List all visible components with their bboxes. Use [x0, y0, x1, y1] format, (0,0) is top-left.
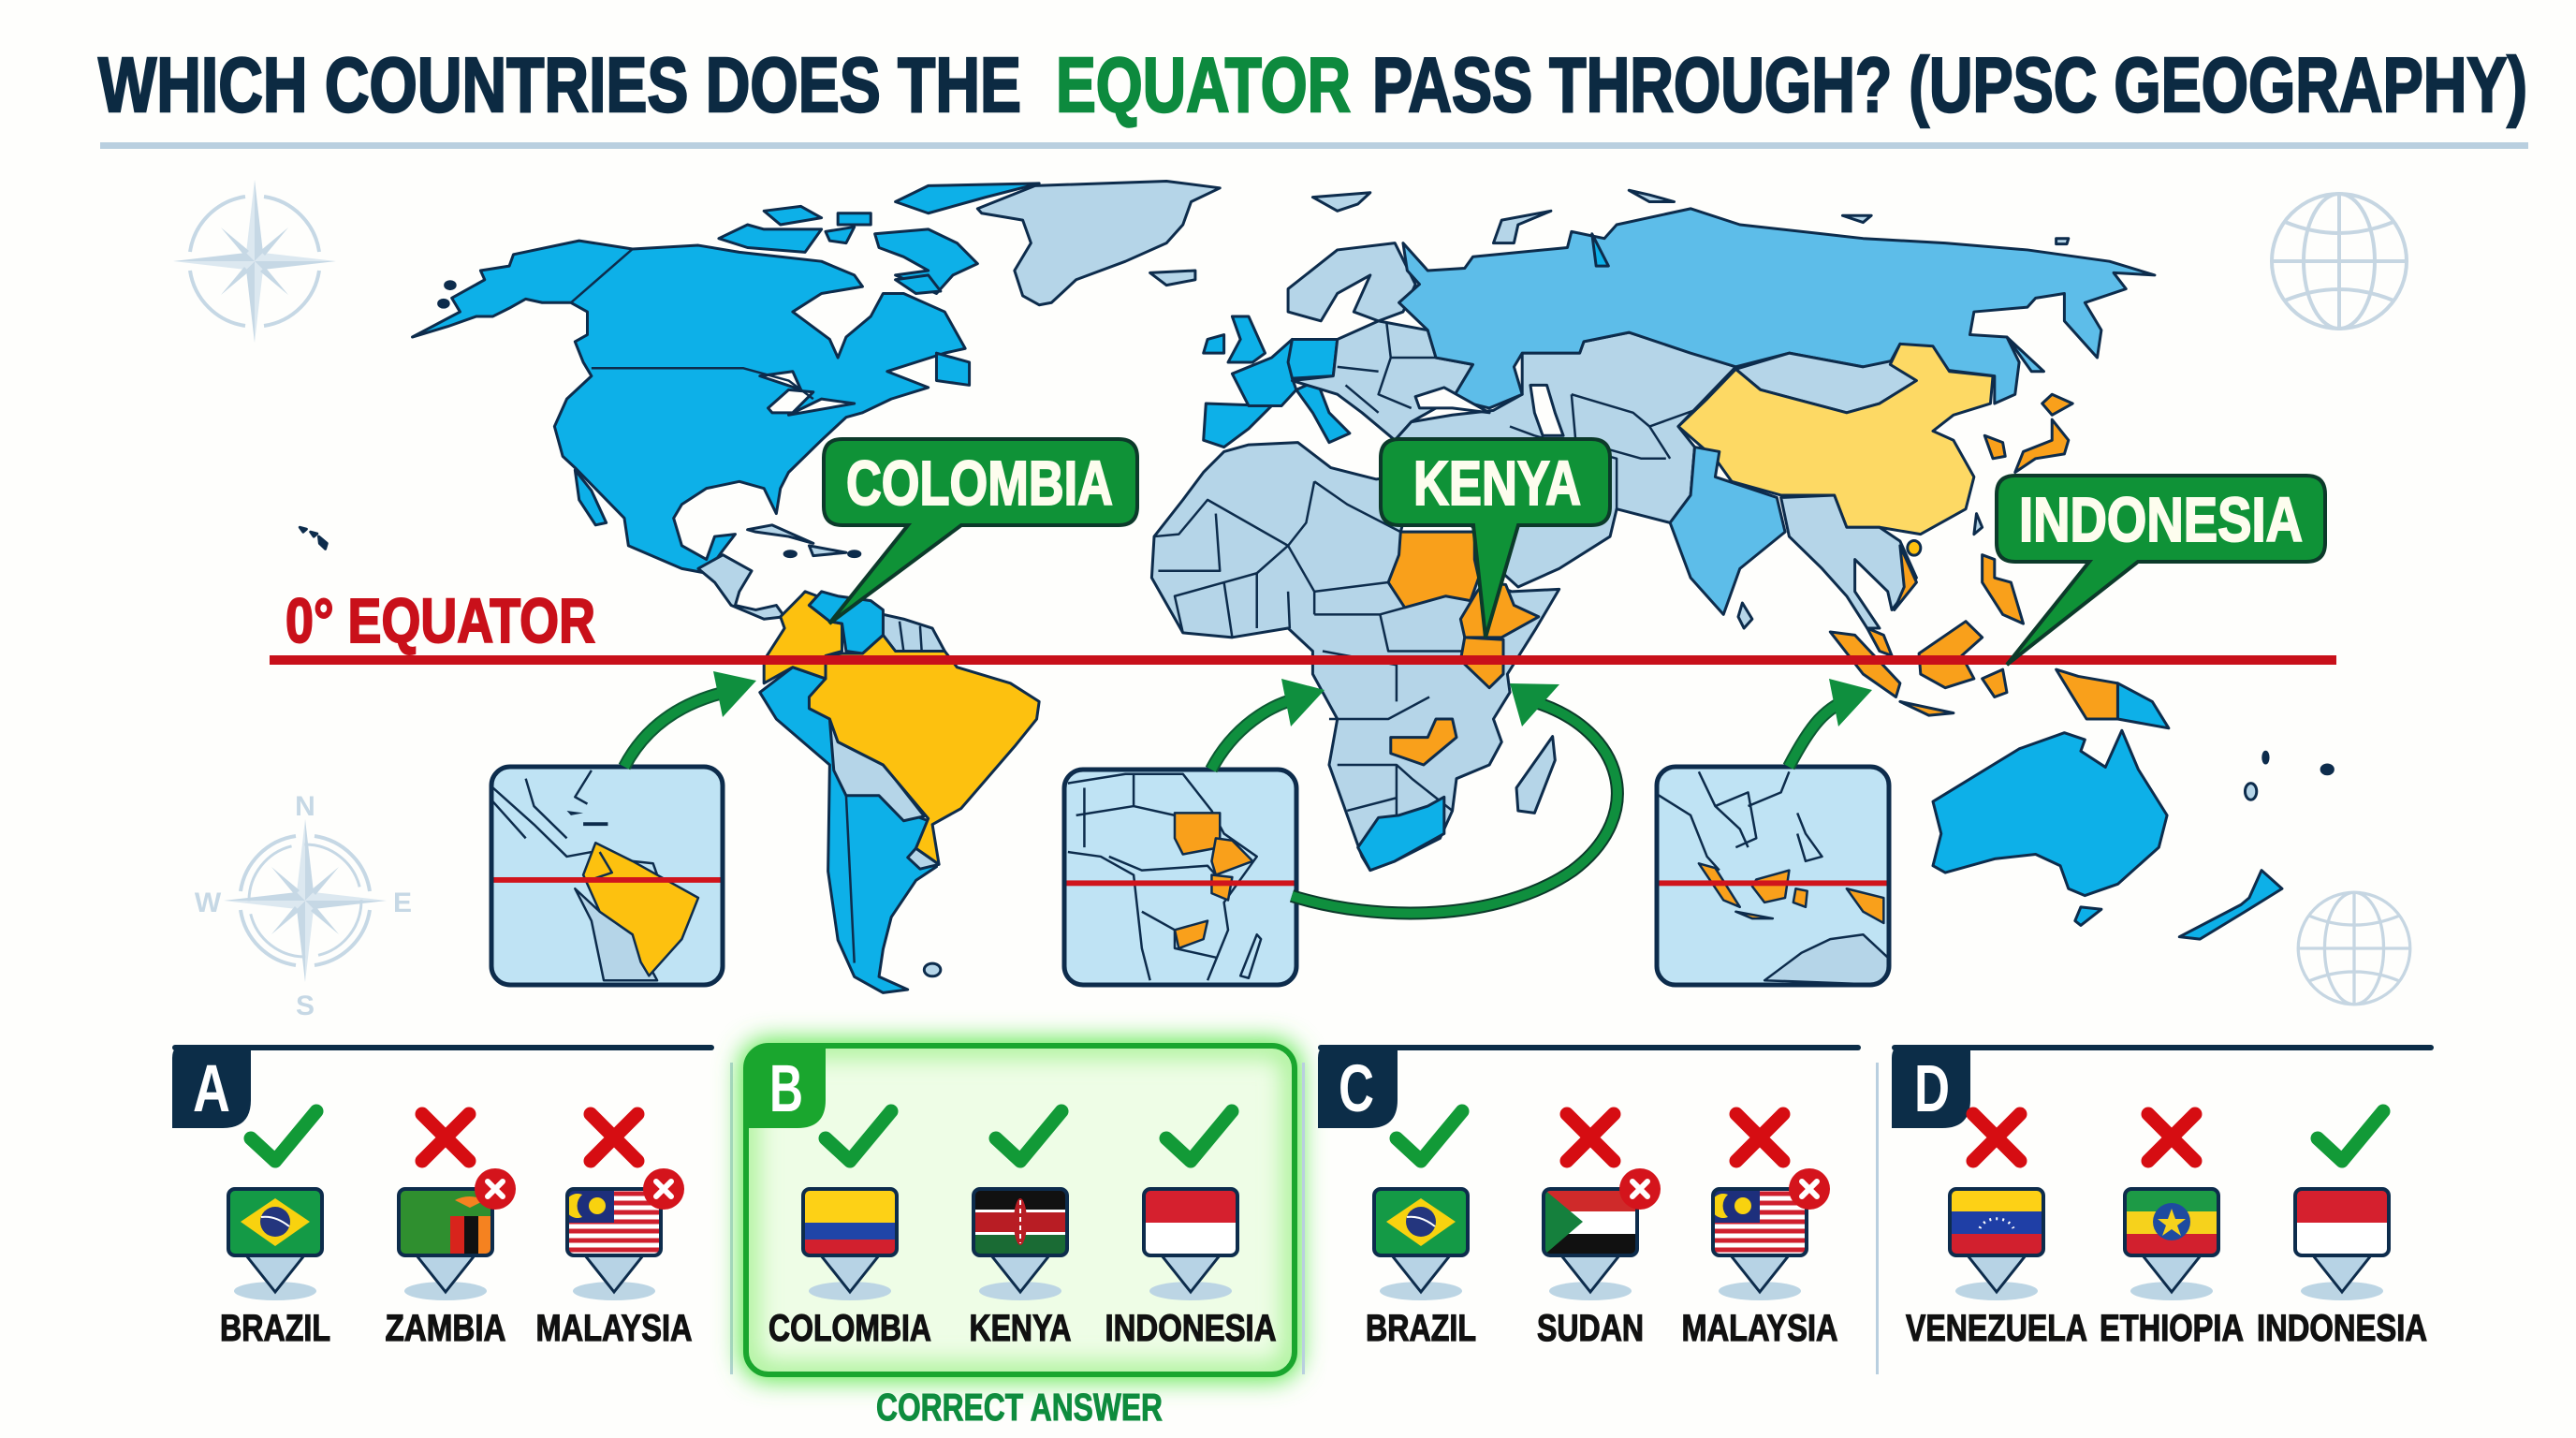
panel C [1318, 1045, 1861, 1349]
title [98, 41, 2527, 128]
Africa [1151, 443, 1559, 871]
equator label: 0° EQUATOR [285, 586, 595, 656]
arrow: Colombia inset to map [624, 671, 756, 767]
arrow: Africa inset to Kenya [1292, 683, 1617, 913]
Australia and New Zealand [1933, 730, 2333, 939]
panel D: D [1914, 1052, 1950, 1126]
option: Sudan [1537, 1114, 1661, 1349]
option: Malaysia [535, 1114, 693, 1349]
callout: Kenya: KENYA [1413, 448, 1581, 519]
option: Colombia [768, 1111, 931, 1349]
panel A: A [193, 1052, 230, 1126]
option: Indonesia [2257, 1111, 2427, 1349]
icon: globe bottom right [2298, 892, 2410, 1005]
badge B [746, 1046, 826, 1128]
callout: Colombia: COLOMBIA [846, 448, 1113, 519]
arrow: Southeast Asia inset to map [1789, 679, 1872, 767]
world map [300, 181, 2333, 992]
option: Colombia: COLOMBIA [768, 1308, 931, 1349]
icon: globe top right [2272, 194, 2407, 329]
option: Zambia: ZAMBIA [386, 1308, 505, 1349]
North America [300, 181, 1220, 619]
badge C [1318, 1045, 1398, 1128]
callout: Kenya [1381, 439, 1610, 638]
title: WHICH COUNTRIES DOES THE [98, 41, 1021, 128]
inset map: South America [491, 767, 723, 985]
South America [760, 592, 1039, 992]
panel A [172, 1045, 714, 1349]
callout: Colombia [824, 439, 1137, 624]
panel C: C [1339, 1052, 1374, 1126]
option: Ethiopia: ETHIOPIA [2100, 1308, 2244, 1349]
option: Kenya [970, 1111, 1071, 1349]
callout: Indonesia [1997, 476, 2325, 665]
option: Brazil: BRAZIL [220, 1308, 330, 1349]
option: Venezuela: VENEZUELA [1906, 1308, 2087, 1349]
inset map: Southeast Asia [1657, 767, 1889, 985]
icon: compass bottom left [195, 791, 412, 1021]
correct answer label: CORRECT ANSWER [876, 1386, 1163, 1429]
option: Malaysia: MALAYSIA [1681, 1308, 1838, 1349]
option: Kenya: KENYA [970, 1308, 1071, 1349]
option: Brazil: BRAZIL [1366, 1308, 1476, 1349]
panel B: correct answer: B [769, 1052, 803, 1126]
option: Indonesia: INDONESIA [1105, 1308, 1277, 1349]
option: Venezuela [1906, 1114, 2087, 1349]
icon: compass bottom left: E [393, 888, 412, 918]
badge D [1892, 1045, 1970, 1128]
equator line [270, 655, 2336, 665]
icon: compass top left [173, 180, 336, 343]
option: Sudan: SUDAN [1537, 1308, 1644, 1349]
icon: compass bottom left: N [295, 791, 315, 822]
option: Malaysia: MALAYSIA [535, 1308, 693, 1349]
icon: compass bottom left: S [296, 990, 315, 1021]
option: Brazil [1366, 1111, 1476, 1349]
option: Indonesia [1105, 1111, 1277, 1349]
panel B: correct answer [746, 1046, 1295, 1374]
option: Brazil [220, 1111, 330, 1349]
option: Malaysia [1681, 1114, 1838, 1349]
option: Zambia [386, 1114, 516, 1349]
arrow: Africa inset to map [1211, 679, 1325, 770]
panel D [1892, 1045, 2434, 1349]
option: Indonesia: INDONESIA [2257, 1308, 2427, 1349]
badge A [172, 1045, 251, 1128]
callout: Indonesia: INDONESIA [2019, 485, 2303, 555]
Eurasia, China, Indonesia and Southeast Asia [1204, 190, 2169, 728]
title: EQUATOR [1056, 41, 1351, 128]
inset map: Africa [1064, 770, 1296, 985]
option: Ethiopia [2100, 1114, 2244, 1349]
icon: compass bottom left: W [195, 888, 222, 918]
